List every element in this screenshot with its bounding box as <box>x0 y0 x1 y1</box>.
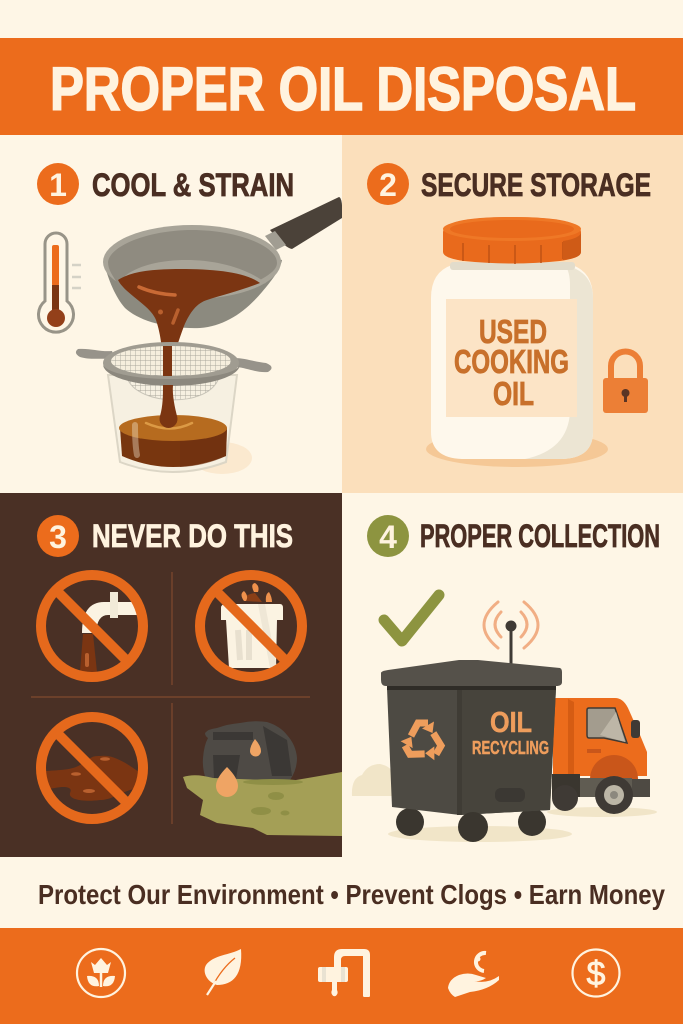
jar label text: COOKING <box>454 343 569 380</box>
jar label text: OIL <box>493 375 534 412</box>
step 4 badge <box>367 515 409 557</box>
icon: thermometer <box>38 233 81 332</box>
footer icon band <box>0 928 683 1024</box>
icon: leaf <box>205 949 241 995</box>
icon: glass jar with oil <box>108 375 252 474</box>
icon: wireless signal <box>484 602 538 648</box>
icon: trash bag leaking oil on grass <box>183 721 342 836</box>
step 1 heading: COOL & STRAIN <box>92 167 294 203</box>
icon: faucet <box>318 949 370 997</box>
step 3 heading: NEVER DO THIS <box>92 518 293 554</box>
step 4 badge: 4 <box>379 519 397 555</box>
bin label: RECYCLING <box>472 738 549 758</box>
icon: hand with coin <box>448 953 499 997</box>
icon: no pouring in trash <box>200 575 302 677</box>
jar label text <box>454 313 569 412</box>
icon: padlock <box>603 352 648 413</box>
step 2 badge <box>367 163 409 205</box>
step 3 badge: 3 <box>49 519 67 555</box>
icon: check mark <box>384 595 439 641</box>
icon: no pouring down the sink <box>41 575 143 677</box>
icon: dollar coin <box>572 950 620 996</box>
recycling symbol <box>401 722 446 761</box>
step 1 badge: 1 <box>49 167 67 203</box>
bin label <box>472 707 549 758</box>
icon: no pouring on ground <box>41 717 143 819</box>
icon: plant in circle <box>77 949 125 997</box>
icon: jar of used cooking oil <box>426 217 608 467</box>
panel: never do this <box>0 493 342 857</box>
bin label: OIL <box>490 707 532 739</box>
background hill <box>352 764 392 796</box>
title banner <box>0 38 683 135</box>
step 3 badge <box>37 515 79 557</box>
step 2 badge: 2 <box>379 167 397 203</box>
icon: frying pan pouring oil <box>103 197 342 376</box>
icon: orange truck <box>547 698 657 817</box>
step 1 badge <box>37 163 79 205</box>
icon: recycling bin <box>381 620 572 842</box>
jar label text: USED <box>479 313 547 350</box>
panel: secure storage <box>342 135 683 493</box>
panel: cool and strain <box>0 135 342 493</box>
panel: proper collection <box>342 493 683 857</box>
icon: dollar coin: $ <box>587 955 606 993</box>
icon: mesh strainer <box>76 342 272 428</box>
